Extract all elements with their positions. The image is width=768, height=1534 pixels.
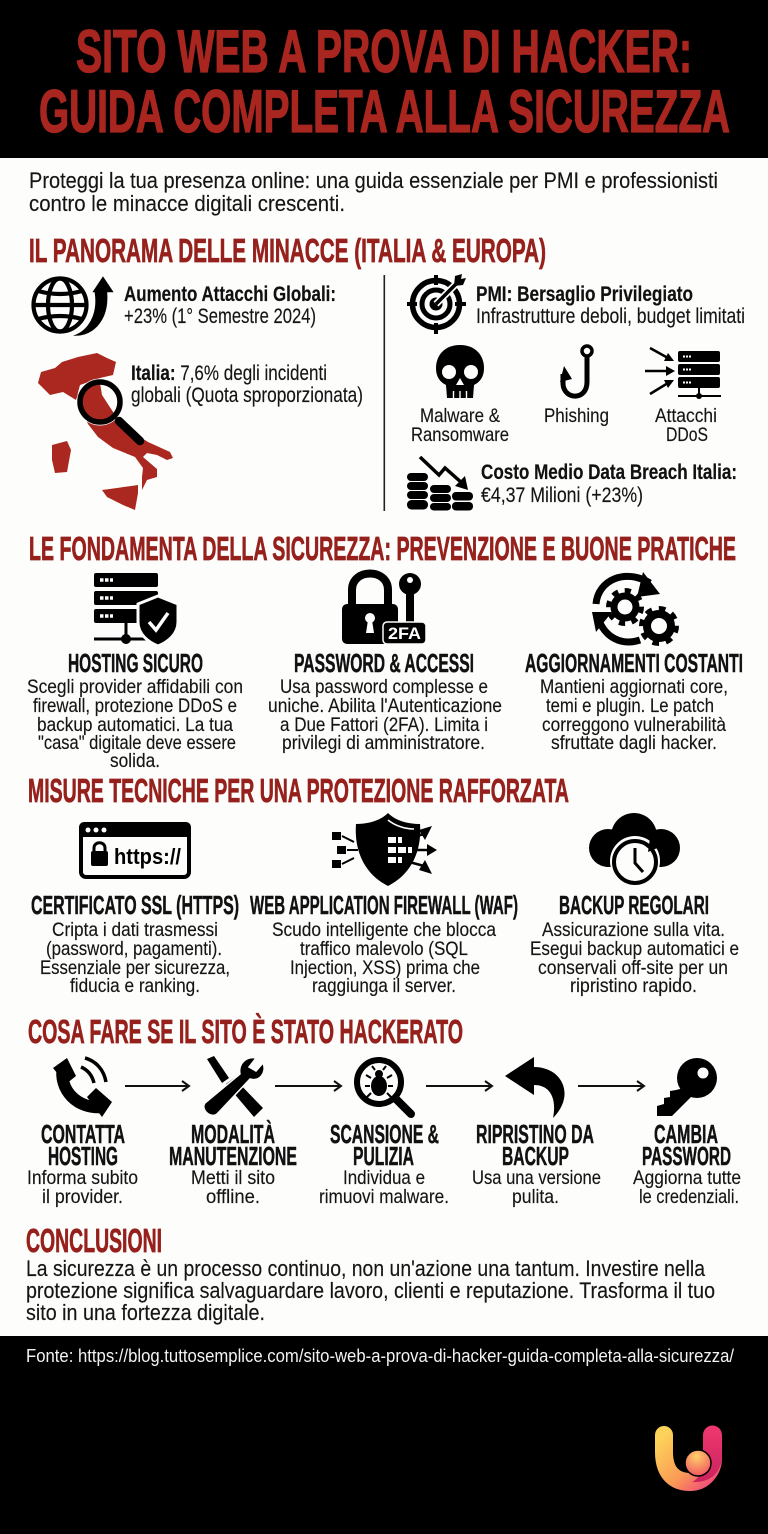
card: regular backups: conservali off-site per un <box>538 957 728 979</box>
card: regular backups <box>530 890 739 997</box>
panel: threat landscape <box>29 232 745 511</box>
card: constant updates: temi e plugin. Le patch <box>546 695 714 717</box>
label: DDoS attacks: DDoS <box>666 424 708 446</box>
card: secure hosting: backup automatici. La tua <box>37 714 233 736</box>
icon: map of Italy with magnifier <box>38 353 173 510</box>
step: change password: le credenziali. <box>639 1186 739 1208</box>
step: maintenance mode: offline. <box>206 1186 260 1208</box>
step: restore backup: RIPRISTINO DA <box>476 1119 594 1149</box>
icon: cloud backup clock <box>589 813 680 886</box>
text: conclusions body <box>26 1256 715 1325</box>
step: scan and clean: SCANSIONE & <box>330 1119 439 1149</box>
heading: hacked steps: COSA FARE SE IL SITO È STATO HACKERATO <box>28 1013 463 1050</box>
arrow: step 3 to 4 <box>426 1081 492 1091</box>
text: global attacks <box>124 283 336 328</box>
card: secure hosting: HOSTING SICURO <box>68 648 203 678</box>
icon: coin stacks with falling arrow <box>407 457 473 510</box>
panel: security foundations <box>27 530 743 772</box>
step: maintenance mode <box>169 1119 297 1208</box>
card: regular backups: ripristino rapido. <box>570 975 697 997</box>
label: phishing: Phishing <box>544 405 609 427</box>
icon: target with arrow <box>407 274 466 334</box>
panel: technical measures <box>28 772 739 997</box>
label: DDoS attacks: Attacchi <box>655 405 717 427</box>
icon: globe with rising arrow <box>34 275 115 337</box>
card: SSL certificate: (password, pagamenti). <box>46 938 222 960</box>
card: passwords and access: Usa password complesse e <box>280 676 488 698</box>
step: scan and clean <box>319 1119 449 1208</box>
step: change password: Aggiorna tutte <box>633 1167 741 1189</box>
step: contact hosting: HOSTING <box>48 1141 118 1171</box>
arrow: step 2 to 3 <box>275 1081 341 1091</box>
card: SSL certificate <box>31 890 239 997</box>
card: web application firewall: raggiunga il server. <box>312 975 456 997</box>
card: secure hosting <box>27 648 243 772</box>
label: malware <box>411 405 509 446</box>
card: regular backups: Assicurazione sulla vita. <box>542 919 725 941</box>
card: SSL certificate: Cripta i dati trasmessi <box>52 919 218 941</box>
text: SMEs targeted <box>476 283 745 328</box>
icon: browser with https: https:// <box>114 844 181 869</box>
card: passwords and access: privilegi di amministratore. <box>282 732 485 754</box>
step: restore backup <box>472 1119 601 1208</box>
icon: magnifier with bug <box>357 1060 411 1114</box>
icon: key <box>657 1058 717 1116</box>
text: SMEs targeted: PMI: Bersaglio Privilegiato <box>476 283 693 306</box>
intro text: contro le minacce digitali crescenti. <box>29 191 345 216</box>
icon: phone <box>53 1058 112 1117</box>
text: Italy share <box>131 362 363 407</box>
card: constant updates <box>525 648 743 754</box>
card: SSL certificate: CERTIFICATO SSL (HTTPS) <box>31 890 239 920</box>
step: scan and clean: rimuovi malware. <box>319 1186 449 1208</box>
step: contact hosting: CONTATTA <box>41 1119 125 1149</box>
text: global attacks: Aumento Attacchi Globali: <box>124 283 336 306</box>
text: global attacks: +23% (1° Semestre 2024) <box>124 305 316 328</box>
icon: update gears with cycle arrows <box>592 572 676 643</box>
step: restore backup: pulita. <box>512 1186 559 1208</box>
card: SSL certificate: fiducia e ranking. <box>70 975 200 997</box>
label: malware: Ransomware <box>411 424 509 446</box>
icon: browser with https <box>79 822 191 877</box>
card: passwords and access <box>268 648 502 754</box>
panel: what to do if hacked <box>27 1013 741 1208</box>
step: maintenance mode: MODALITÀ <box>191 1119 275 1149</box>
title banner <box>0 0 768 158</box>
card: secure hosting: Scegli provider affidabili con <box>27 676 243 698</box>
icon: padlock key and 2FA: 2FA <box>388 624 421 643</box>
footer panel <box>0 1336 768 1534</box>
step: contact hosting <box>27 1119 138 1208</box>
text: data breach cost <box>481 461 737 507</box>
text: Italy share: Italia: 7,6% degli incidenti <box>131 362 327 385</box>
card: web application firewall <box>250 890 518 997</box>
card: secure hosting: firewall, protezione DDoS e <box>33 695 237 717</box>
step: change password <box>633 1119 741 1208</box>
card: constant updates: correggono vulnerabilità <box>542 714 726 736</box>
heading: conclusions: CONCLUSIONI <box>26 1222 162 1259</box>
icon: padlock key and 2FA <box>342 573 426 644</box>
card: constant updates: sfruttate dagli hacker. <box>551 732 717 754</box>
icon: fishing hook <box>560 346 592 396</box>
text: Italy share: globali (Quota sproporzionata) <box>131 384 363 407</box>
card: web application firewall: Injection, XSS) prima che <box>290 957 480 979</box>
arrow: step 1 to 2 <box>125 1081 189 1091</box>
card: constant updates: Mantieni aggiornati core, <box>540 676 728 698</box>
text: data breach cost: €4,37 Milioni (+23%) <box>481 484 643 507</box>
text: conclusions body: sito in una fortezza digitale. <box>26 1300 265 1325</box>
card: web application firewall: Scudo intelligente che blocca <box>272 919 496 941</box>
step: maintenance mode: Metti il sito <box>191 1167 275 1189</box>
source link: Fonte: https://blog.tuttosemplice.com/sito-web-a-prova-di-hacker-guida-completa-alla-sicurezza/ <box>26 1346 734 1366</box>
card: web application firewall: traffico malevolo (SQL <box>300 938 468 960</box>
step: scan and clean: PULIZIA <box>353 1141 414 1171</box>
icon: wrench and screwdriver <box>204 1056 264 1117</box>
arrow: step 4 to 5 <box>578 1081 644 1091</box>
step: restore backup: BACKUP <box>502 1141 569 1171</box>
intro text <box>29 168 718 216</box>
step: maintenance mode: MANUTENZIONE <box>169 1141 297 1171</box>
step: contact hosting: Informa subito <box>27 1167 138 1189</box>
step: change password: CAMBIA <box>654 1119 718 1149</box>
intro text: Proteggi la tua presenza online: una guida essenziale per PMI e professionisti <box>29 168 718 193</box>
card: passwords and access: uniche. Abilita l'Autenticazione <box>268 695 502 717</box>
card: web application firewall: WEB APPLICATION FIREWALL (WAF) <box>250 890 518 920</box>
panel: conclusions <box>26 1222 715 1325</box>
icon: back arrow <box>505 1057 565 1118</box>
card: regular backups: Esegui backup automatici e <box>530 938 739 960</box>
step: scan and clean: Individua e <box>343 1167 425 1189</box>
step: contact hosting: il provider. <box>42 1186 123 1208</box>
icon: WAF shield filtering traffic <box>332 813 437 886</box>
card: secure hosting: solida. <box>110 750 160 772</box>
icon: DDoS arrows into server <box>645 348 721 399</box>
label: malware: Malware & <box>420 405 500 427</box>
step: restore backup: Usa una versione <box>472 1167 601 1189</box>
card: passwords and access: PASSWORD & ACCESSI <box>294 648 474 678</box>
icon: server with shield <box>94 573 178 646</box>
card: SSL certificate: Essenziale per sicurezza, <box>40 957 230 979</box>
card: secure hosting: "casa" digitale deve essere <box>38 732 236 754</box>
card: passwords and access: a Due Fattori (2FA). Limita i <box>280 714 488 736</box>
label: DDoS attacks <box>655 405 717 446</box>
logo <box>664 1426 722 1482</box>
icon: skull <box>436 345 484 398</box>
